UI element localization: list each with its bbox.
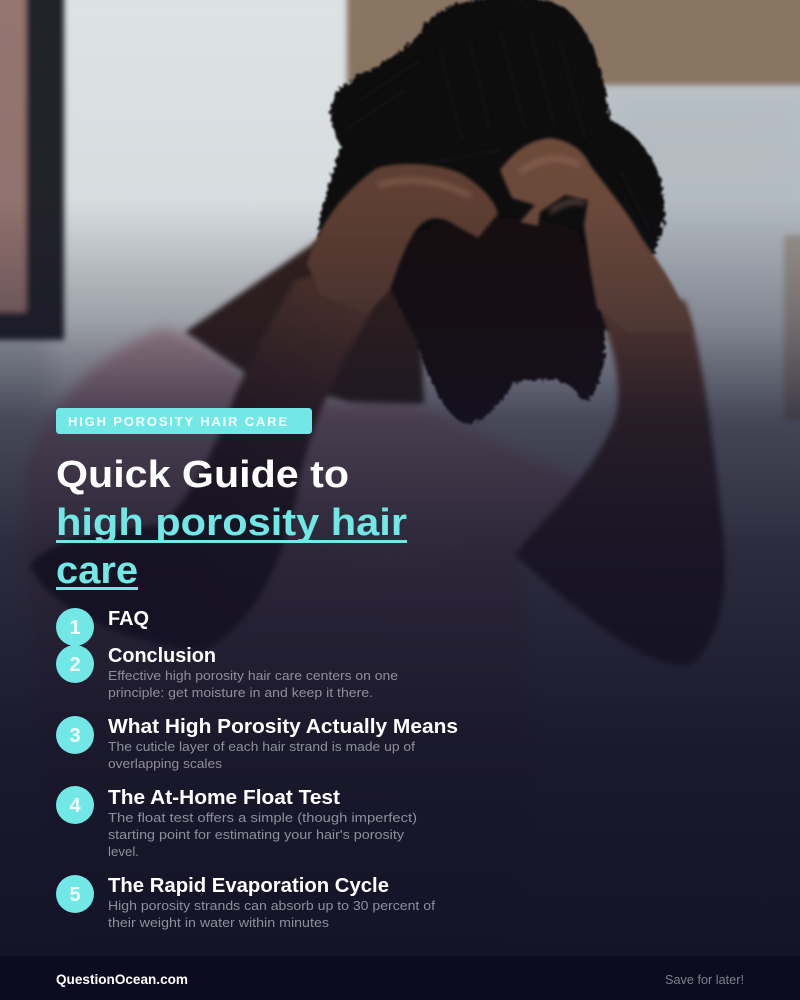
picture frame: top right bbox=[347, 0, 800, 85]
list item 4: The At-Home Float Test bbox=[56, 786, 417, 859]
picture frame: left bbox=[0, 0, 64, 340]
shirt print bbox=[320, 534, 470, 566]
footer brand: QuestionOcean.com bbox=[56, 972, 188, 987]
left hand bbox=[307, 164, 498, 314]
list item 5: The Rapid Evaporation Cycle: High porosity strands can absorb up to 30 percent of bbox=[108, 898, 435, 913]
list item 2: Conclusion: principle: get moisture in and keep it there. bbox=[108, 685, 373, 700]
list item 3: What High Porosity Actually Means: The cuticle layer of each hair strand is made up of bbox=[108, 739, 415, 754]
list item 4: The At-Home Float Test: level. bbox=[108, 844, 139, 859]
list item 3: What High Porosity Actually Means bbox=[56, 716, 458, 771]
hair: loose strands bbox=[388, 217, 606, 424]
title: high porosity hair bbox=[56, 502, 407, 544]
list item 1: FAQ: FAQ bbox=[108, 608, 149, 630]
list item 5: The Rapid Evaporation Cycle: their weight in water within minutes bbox=[108, 915, 330, 930]
list item 5: The Rapid Evaporation Cycle: The Rapid Evaporation Cycle bbox=[108, 875, 389, 897]
list item 2: Conclusion: Effective high porosity hair care centers on one bbox=[108, 668, 398, 683]
right hand bbox=[500, 138, 693, 333]
list item 1: FAQ bbox=[56, 608, 149, 646]
hair: braid texture bbox=[345, 30, 650, 230]
left forearm bbox=[30, 270, 372, 652]
shelf right bbox=[784, 235, 800, 420]
list item 1: FAQ: 1 bbox=[69, 617, 81, 639]
list item 2: Conclusion bbox=[56, 645, 398, 700]
list item 3: What High Porosity Actually Means: 3 bbox=[69, 725, 81, 747]
list item 5: The Rapid Evaporation Cycle: 5 bbox=[69, 884, 81, 906]
list item 3: What High Porosity Actually Means: overlapping scales bbox=[108, 756, 223, 771]
hair: upper braids bbox=[318, 0, 664, 335]
list item 5: The Rapid Evaporation Cycle bbox=[56, 875, 435, 930]
list item 3: What High Porosity Actually Means: What High Porosity Actually Means bbox=[108, 716, 458, 738]
badge: high porosity hair care: HIGH POROSITY HAIR CARE bbox=[68, 414, 287, 429]
list item 4: The At-Home Float Test: The float test offers a simple (though imperfect) bbox=[108, 810, 417, 825]
finger highlights bbox=[378, 159, 585, 212]
list item 4: The At-Home Float Test: 4 bbox=[69, 795, 81, 817]
footer bar bbox=[0, 956, 800, 1000]
badge: high porosity hair care bbox=[56, 408, 312, 434]
list item 4: The At-Home Float Test: The At-Home Float Test bbox=[108, 787, 340, 809]
list item 2: Conclusion: 2 bbox=[69, 654, 81, 676]
shirt bbox=[25, 328, 600, 960]
neck and shoulder bbox=[185, 240, 424, 404]
list item 2: Conclusion: Conclusion bbox=[108, 645, 216, 667]
footer note: Save for later! bbox=[665, 973, 744, 987]
list item 4: The At-Home Float Test: starting point for estimating your hair's porosity bbox=[108, 827, 405, 842]
title bbox=[56, 454, 407, 592]
title: Quick Guide to bbox=[56, 454, 349, 496]
right arm bbox=[515, 300, 725, 665]
title: care bbox=[56, 550, 138, 592]
